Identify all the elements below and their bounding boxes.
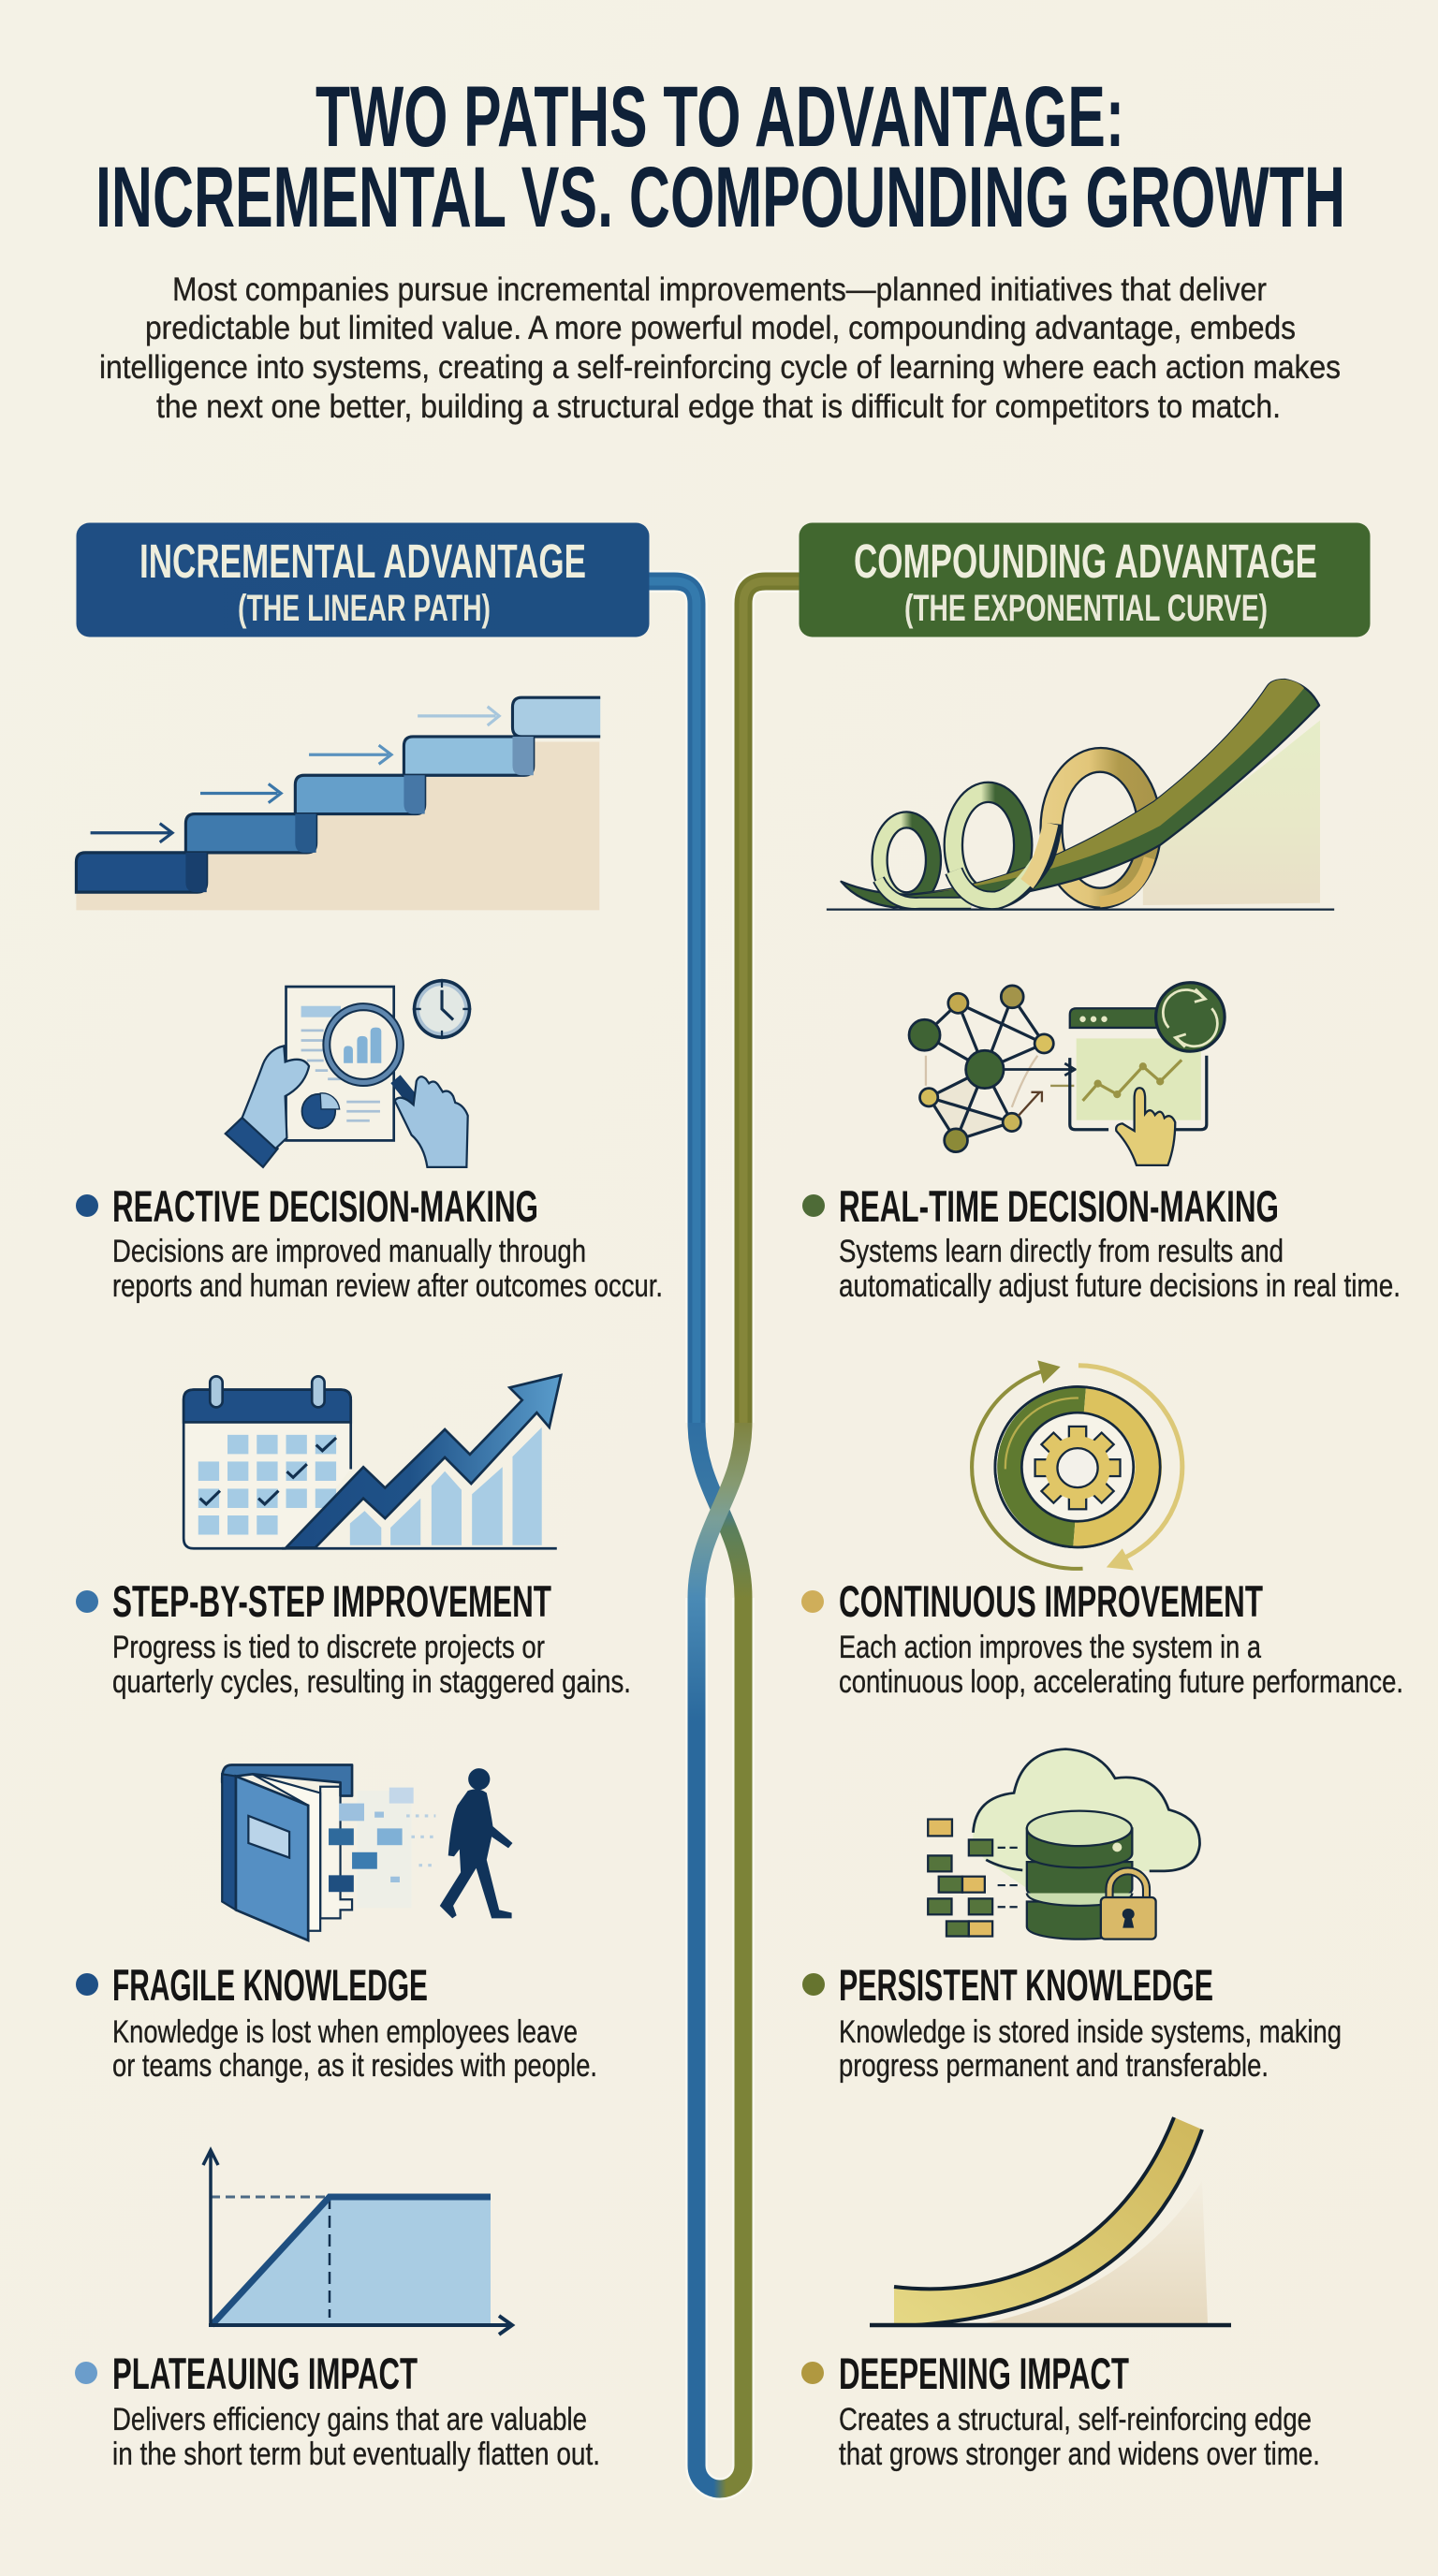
item: deepening impact: Creates a structural, self-reinforcing edge	[839, 2402, 1312, 2437]
bullet	[801, 1590, 824, 1613]
item: continuous improvement	[801, 1576, 1403, 1700]
item: deepening impact: that grows stronger and widens over time.	[839, 2437, 1320, 2472]
intro paragraph: Most companies pursue incremental improvements—planned initiatives that deliver	[172, 271, 1267, 308]
icon: continuous improvement gear loop	[972, 1360, 1182, 1570]
item: real-time decision-making: Systems learn directly from results and	[839, 1234, 1284, 1269]
bullet	[76, 1194, 98, 1217]
item: plateauing impact: Delivers efficiency gains that are valuable	[112, 2402, 587, 2437]
item: persistent knowledge: progress permanent and transferable.	[839, 2048, 1269, 2084]
header: incremental advantage: (THE LINEAR PATH)	[238, 588, 491, 629]
header: compounding advantage: (THE EXPONENTIAL CURVE)	[904, 588, 1268, 629]
item: plateauing impact: in the short term but eventually flatten out.	[112, 2437, 600, 2472]
item: step-by-step improvement: Progress is tied to discrete projects or	[112, 1630, 545, 1665]
item: plateauing impact: PLATEAUING IMPACT	[112, 2349, 418, 2398]
item: deepening impact	[801, 2349, 1320, 2472]
intro paragraph	[99, 271, 1341, 425]
central intertwined path connector	[646, 581, 802, 2489]
icon: neural network feeding a dashboard	[909, 983, 1225, 1165]
item: fragile knowledge: or teams change, as it resides with people.	[112, 2048, 597, 2084]
item: deepening impact: DEEPENING IMPACT	[839, 2349, 1129, 2398]
chart: exponential curve	[870, 2117, 1231, 2325]
intro paragraph: intelligence into systems, creating a self-reinforcing cycle of learning where each action makes	[99, 349, 1341, 386]
item: reactive decision-making: reports and human review after outcomes occur.	[112, 1268, 663, 1304]
bullet	[75, 2362, 97, 2384]
bullet	[802, 1194, 825, 1217]
illustration: spiral ribbon	[827, 680, 1334, 910]
icon: report review with magnifier and clock	[226, 979, 471, 1167]
panel: incremental advantage	[75, 522, 663, 2472]
header: compounding advantage	[800, 522, 1371, 637]
icon: calendar and rising arrow	[183, 1375, 561, 1548]
chart: plateau curve	[203, 2150, 512, 2334]
bullet	[76, 1973, 98, 1996]
intro paragraph: the next one better, building a structural edge that is difficult for competitors to match.	[156, 388, 1281, 425]
item: fragile knowledge	[76, 1960, 597, 2084]
item: continuous improvement: Each action improves the system in a	[839, 1630, 1261, 1665]
item: step-by-step improvement: quarterly cycles, resulting in staggered gains.	[112, 1664, 631, 1700]
item: reactive decision-making: Decisions are improved manually through	[112, 1234, 586, 1269]
item: step-by-step improvement: STEP-BY-STEP IMPROVEMENT	[112, 1576, 551, 1626]
item: step-by-step improvement	[76, 1576, 631, 1700]
bullet	[802, 1973, 825, 1996]
item: real-time decision-making	[802, 1181, 1401, 1304]
header: incremental advantage	[77, 522, 650, 637]
panel: compounding advantage	[800, 522, 1403, 2472]
item: reactive decision-making: REACTIVE DECISION-MAKING	[112, 1181, 538, 1231]
item: persistent knowledge: PERSISTENT KNOWLEDGE	[839, 1960, 1213, 2010]
item: fragile knowledge: Knowledge is lost when employees leave	[112, 2014, 578, 2050]
illustration: staircase with arrows	[76, 697, 600, 910]
icon: cloud database with lock	[928, 1749, 1199, 1939]
item: plateauing impact	[75, 2349, 600, 2472]
bullet	[801, 2362, 824, 2384]
item: fragile knowledge: FRAGILE KNOWLEDGE	[112, 1960, 428, 2010]
icon: book dissolving and person walking away	[222, 1765, 512, 1940]
item: persistent knowledge	[802, 1960, 1342, 2084]
title	[95, 69, 1345, 245]
intro paragraph: predictable but limited value. A more powerful model, compounding advantage, embeds	[145, 310, 1296, 346]
header: incremental advantage: INCREMENTAL ADVANTAGE	[139, 534, 586, 588]
bullet	[76, 1590, 98, 1613]
item: reactive decision-making	[76, 1181, 663, 1304]
